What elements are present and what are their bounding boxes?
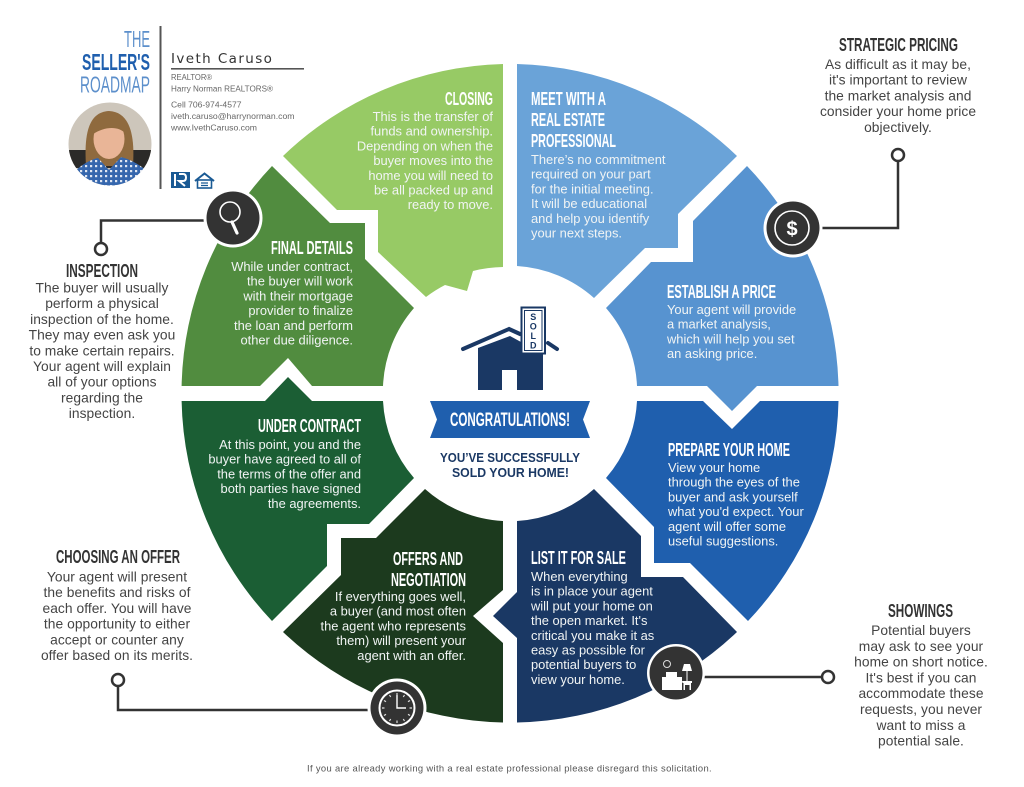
text: inspection body: Your agent will explain <box>33 359 171 374</box>
footer disclaimer: If you are already working with a real estate professional please disregard this solicitation. <box>307 762 712 774</box>
icon: realtor logo <box>171 172 190 188</box>
text: successfully sold <box>440 451 581 480</box>
panel: establish a price: Your agent will provide <box>667 302 796 317</box>
panel: prepare your home: useful suggestions. <box>668 534 778 548</box>
text: inspection body <box>29 280 175 421</box>
text: strategic pricing body: objectively. <box>864 120 932 135</box>
icon: dollar <box>764 198 822 258</box>
text: showings body: may ask to see your <box>859 639 984 654</box>
text: strategic pricing body <box>820 57 976 135</box>
text: inspection body: perform a physical <box>45 296 159 311</box>
panel: closing: This is the transfer of <box>373 109 493 124</box>
panel: offers and negotiation: a buyer (and most often <box>330 604 466 619</box>
panel: offers and negotiation: agent with an offer. <box>357 648 466 663</box>
panel: final details: FINAL DETAILS <box>271 237 353 258</box>
text: showings body: It's best if you can <box>866 670 976 685</box>
agent contact: REALTOR® <box>171 72 213 82</box>
divider <box>160 26 162 189</box>
panel: establish a price: a market analysis, <box>667 317 771 332</box>
panel: closing: buyer moves into the <box>373 153 493 168</box>
panel: closing: CLOSING <box>445 88 493 109</box>
icon: sold house: D <box>530 340 537 350</box>
panel: under contract: the terms of the offer and <box>217 466 361 481</box>
title <box>80 26 150 98</box>
arrow: showings connector <box>703 671 834 683</box>
panel: establish a price: ESTABLISH A PRICE <box>667 281 776 302</box>
text: showings body: Potential buyers <box>871 623 971 638</box>
panel: final details: other due diligence. <box>240 332 353 348</box>
heading: strategic pricing <box>820 34 976 135</box>
heading: choosing an offer <box>41 546 193 663</box>
panel: meet with a real estate professional: REAL ESTATE <box>531 109 605 130</box>
panel: under contract: the agreements. <box>268 496 361 511</box>
panel: prepare your home: through the eyes of the <box>668 475 800 490</box>
panel: list it for sale: will put your home on <box>530 598 653 613</box>
icon: magnifier <box>204 188 262 248</box>
panel: meet with a real estate professional <box>517 64 737 298</box>
panel: offers and negotiation: If everything goes well, <box>335 589 466 604</box>
text: inspection body: all of your options <box>47 375 157 390</box>
panel: final details: provider to finalize <box>248 303 353 318</box>
panel: list it for sale: easy as possible for <box>531 642 646 658</box>
icon: furniture <box>647 644 705 702</box>
text: showings body <box>854 623 988 749</box>
agent contact <box>170 51 304 132</box>
panel: offers and negotiation <box>283 489 503 722</box>
text: inspection body: inspection. <box>69 406 135 421</box>
panel: list it for sale: the open market. It's <box>531 613 647 628</box>
panel: under contract: both parties have signed <box>221 481 361 496</box>
panel: final details <box>182 166 414 386</box>
text: successfully sold: SOLD YOUR HOME! <box>452 466 569 480</box>
text: choosing an offer body <box>41 570 193 663</box>
text: showings body: want to miss a <box>876 718 966 733</box>
panel: list it for sale: critical you make it as <box>531 628 654 643</box>
panel: closing: ready to move. <box>408 197 493 212</box>
text: successfully sold: YOU’VE SUCCESSFULLY <box>440 451 581 465</box>
text: strategic pricing body: it's important to review <box>829 73 967 88</box>
arrow: strategic pricing connector <box>820 149 904 228</box>
panel: list it for sale <box>493 489 737 722</box>
panel: establish a price: an asking price. <box>667 346 757 361</box>
text: choosing an offer body: the benefits and risks of <box>44 585 191 600</box>
text: choosing an offer body: the opportunity to either <box>44 617 190 632</box>
panel: offers and negotiation: the agent who represents <box>321 618 466 633</box>
text: showings body: potential sale. <box>878 734 964 749</box>
heading: showings <box>854 600 988 749</box>
panel: meet with a real estate professional: MEET WITH A <box>531 88 606 109</box>
panel: list it for sale: potential buyers to <box>531 657 636 672</box>
panel: closing: be all packed up and <box>374 182 493 198</box>
heading: showings: SHOWINGS <box>888 600 953 621</box>
panel: under contract: UNDER CONTRACT <box>258 415 361 436</box>
icon: sold house <box>463 308 557 390</box>
text: showings body: requests, you never <box>860 702 982 717</box>
icon: clock <box>368 678 426 738</box>
panel: offers and negotiation: OFFERS AND <box>393 548 463 569</box>
panel: closing <box>283 64 503 297</box>
title: ROADMAP <box>80 72 150 98</box>
text: inspection body: to make certain repairs. <box>29 343 175 358</box>
text: choosing an offer body: accept or counter any <box>50 632 184 647</box>
panel: final details: While under contract, <box>231 259 353 274</box>
icon: sold house: L <box>530 331 536 341</box>
text: inspection body: The buyer will usually <box>36 280 169 296</box>
panel: final details: the loan and perform <box>234 318 353 333</box>
panel: meet with a real estate professional: PROFESSIONAL <box>531 130 616 151</box>
text: strategic pricing body: consider your home price <box>820 104 976 119</box>
text: choosing an offer body: Your agent will present <box>47 570 187 584</box>
panel: offers and negotiation: NEGOTIATION <box>391 569 466 590</box>
heading: choosing an offer: CHOOSING AN OFFER <box>56 546 180 567</box>
panel: meet with a real estate professional: for the initial meeting. <box>531 181 654 196</box>
icon: dollar: $ <box>786 218 798 240</box>
banner: congratulations: CONGRATULATIONS! <box>450 409 570 431</box>
agent contact: Iveth Caruso <box>171 51 273 67</box>
agent contact: www.IvethCaruso.com <box>170 122 257 132</box>
panel: closing: Depending on when the <box>357 138 493 153</box>
text: strategic pricing body: As difficult as it may be, <box>825 57 971 72</box>
text: choosing an offer body: offer based on its merits. <box>41 648 193 663</box>
panel: meet with a real estate professional: There’s no commitment <box>531 152 666 167</box>
panel: prepare your home: what you'd expect. Your <box>667 504 804 519</box>
panel: final details: the buyer will work <box>247 274 354 289</box>
panel: prepare your home: buyer and ask yourself <box>668 489 798 504</box>
text: inspection body: They may even ask you <box>29 328 175 343</box>
icon: sold house: O <box>530 322 537 332</box>
text: inspection body: regarding the <box>61 390 143 405</box>
panel: prepare your home <box>606 401 838 621</box>
panel: prepare your home: View your home <box>668 460 760 475</box>
panel: under contract <box>182 377 414 621</box>
icon: equal housing logo <box>195 174 214 188</box>
agent contact: Cell 706-974-4577 <box>171 100 242 110</box>
panel: list it for sale: is in place your agent <box>531 584 653 599</box>
heading: inspection <box>29 260 175 421</box>
text: inspection body: inspection of the home. <box>30 312 174 327</box>
text: choosing an offer body: each offer. You will have <box>42 601 192 616</box>
panel: under contract: At this point, you and the <box>219 437 361 452</box>
arrow: choosing an offer connector <box>112 674 370 710</box>
panel: prepare your home: PREPARE YOUR HOME <box>668 439 790 460</box>
panel: list it for sale: view your home. <box>531 672 625 687</box>
heading: strategic pricing: STRATEGIC PRICING <box>839 34 958 55</box>
text: showings body: home on short notice. <box>854 655 988 670</box>
panel: establish a price <box>606 166 838 411</box>
panel: offers and negotiation: them) will present your <box>336 633 467 648</box>
panel: prepare your home: agent will offer some <box>668 519 786 534</box>
agent photo <box>68 102 152 186</box>
icon: sold house: S <box>530 312 536 322</box>
title: THE <box>124 26 150 52</box>
text: showings body: accommodate these <box>858 686 984 701</box>
heading: inspection: INSPECTION <box>66 260 138 281</box>
panel: meet with a real estate professional: required on your part <box>531 167 651 182</box>
agent contact: iveth.caruso@harrynorman.com <box>171 111 294 121</box>
arrow: inspection connector <box>95 220 206 255</box>
panel: list it for sale: LIST IT FOR SALE <box>531 547 626 568</box>
panel: establish a price: which will help you set <box>666 331 795 346</box>
panel: closing: home you will need to <box>368 168 493 183</box>
panel: meet with a real estate professional: your next steps. <box>531 226 622 240</box>
agent contact: Harry Norman REALTORS® <box>171 84 274 94</box>
text: strategic pricing body: the market analysis and <box>825 88 971 103</box>
panel: final details: with their mortgage <box>242 288 353 303</box>
banner: congratulations <box>430 401 590 438</box>
panel: meet with a real estate professional: It will be educational <box>531 196 647 211</box>
panel: under contract: buyer have agreed to all of <box>208 452 361 467</box>
title: SELLER'S <box>82 49 150 75</box>
panel: list it for sale: When everything <box>531 569 628 584</box>
panel: closing: funds and ownership. <box>370 124 493 139</box>
panel: meet with a real estate professional: and help you identify <box>531 211 650 226</box>
